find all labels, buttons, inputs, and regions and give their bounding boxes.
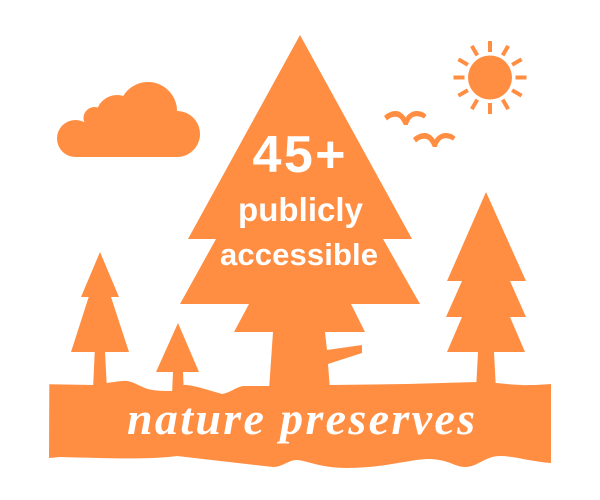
icon: bird lower — [413, 133, 456, 147]
title: nature preserves: nature preserves — [127, 393, 475, 444]
small pine tree — [156, 323, 199, 395]
icon: sun — [454, 41, 526, 114]
stat: 45+: 45+ — [252, 126, 346, 184]
icon: cloud — [57, 82, 200, 157]
icon: bird upper — [384, 111, 426, 125]
big pine tree — [180, 35, 420, 390]
label: accessible: accessible — [220, 237, 378, 272]
label: publicly: publicly — [238, 191, 364, 228]
left pine tree — [71, 252, 129, 390]
right pine tree — [446, 192, 526, 390]
ground banner — [49, 381, 551, 468]
